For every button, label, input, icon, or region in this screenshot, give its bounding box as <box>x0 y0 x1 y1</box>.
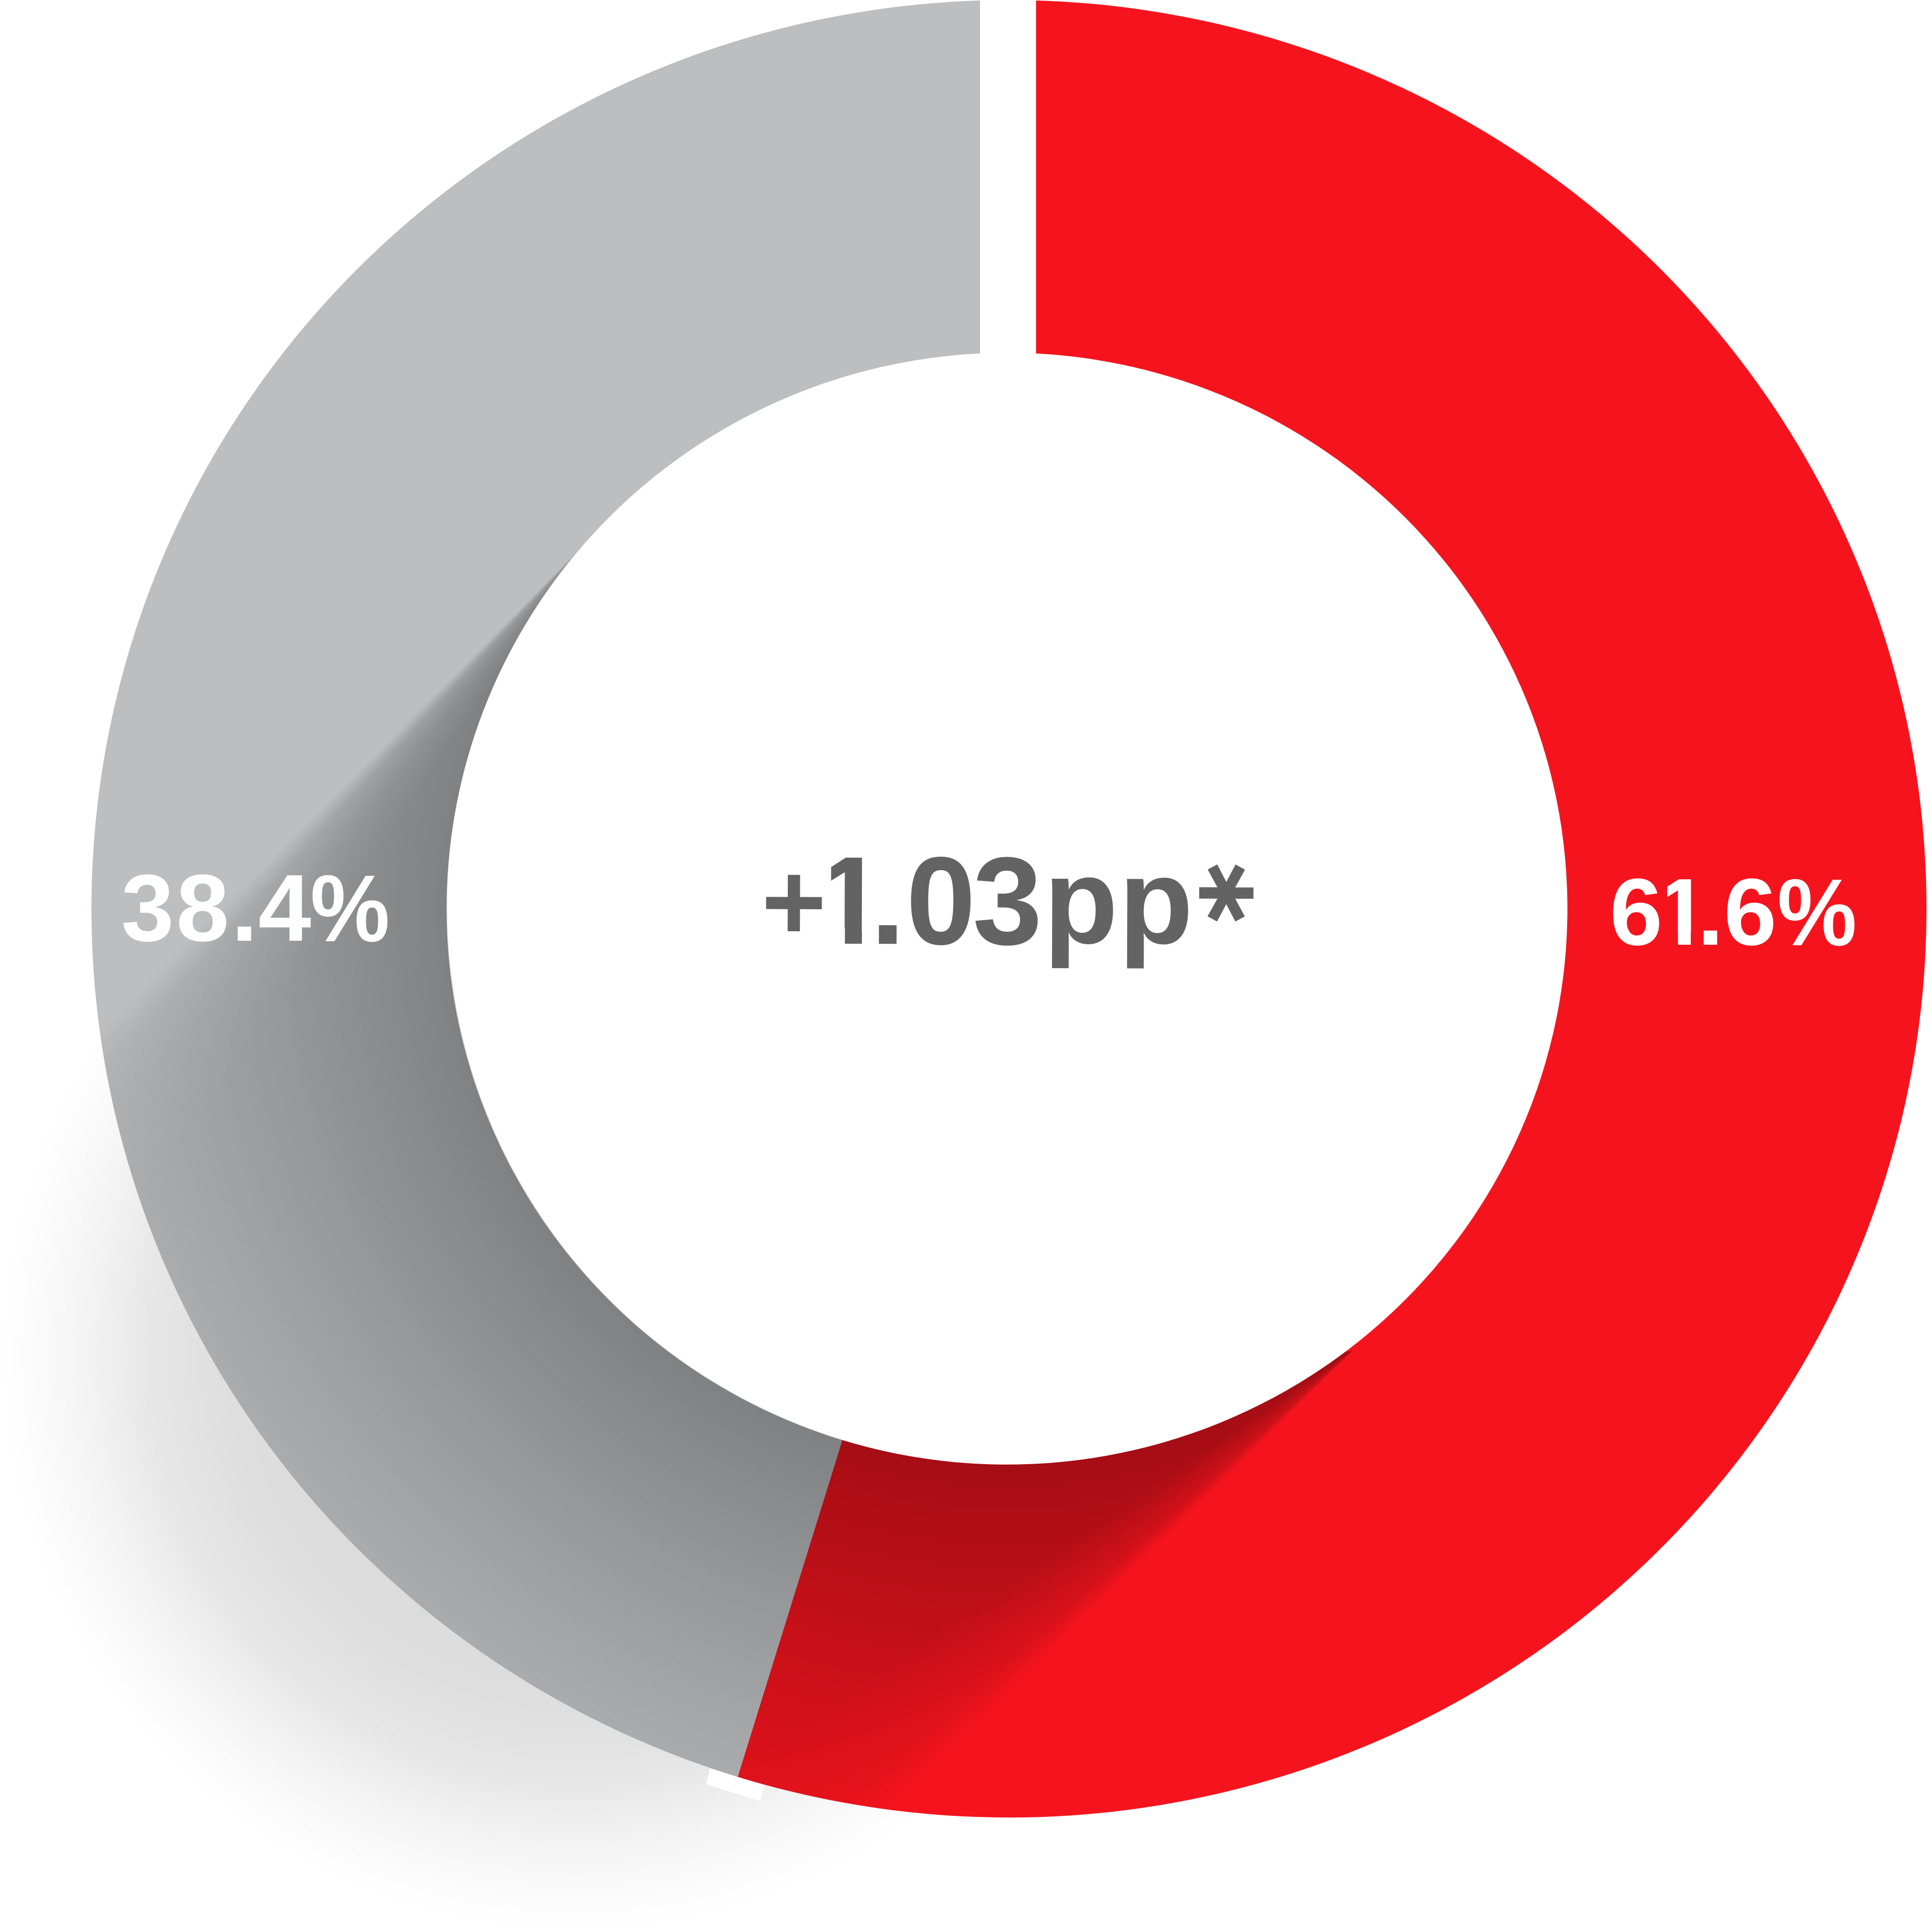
cast shade on red segment <box>738 1351 1352 1806</box>
label: 61.6% <box>1613 878 1855 946</box>
center value: pp <box>1044 833 1193 969</box>
segment: grey 38.4% <box>92 1 980 1777</box>
center value: .03 <box>870 831 1043 971</box>
label: 61.6%: 6 <box>1610 859 1663 965</box>
asterisk: * <box>1142 863 1273 923</box>
labels <box>123 857 1855 969</box>
label: 61.6%: 1 <box>1656 859 1709 965</box>
label: 38.4%: 38.4 <box>121 855 311 961</box>
label: 61.6%: % <box>1777 860 1857 966</box>
white centre of the ring <box>447 353 1569 1465</box>
label: 61.6%: .6 <box>1697 859 1777 965</box>
center value: 1 <box>815 831 885 970</box>
label: 38.4%: % <box>310 856 390 962</box>
white tick under the divider <box>706 1768 765 1801</box>
segment: red 61.6% <box>738 1 1926 1817</box>
drop shadow <box>0 780 1151 1930</box>
center value <box>766 857 1253 969</box>
center value: + <box>761 840 826 964</box>
cast shade on grey segment <box>104 552 842 1777</box>
